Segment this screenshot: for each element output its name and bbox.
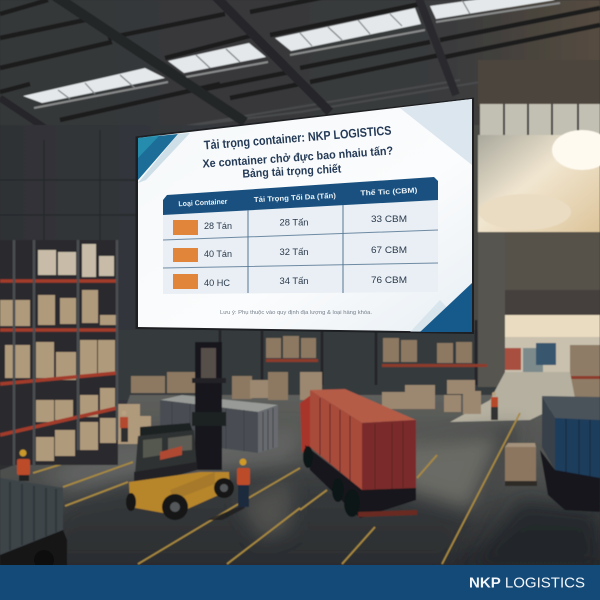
header labels: Thế Tic (CBM): [360, 185, 418, 197]
yellow floor lines: [33, 413, 520, 564]
header labels: Loại Container: [178, 197, 228, 208]
container swatches: [173, 220, 198, 289]
title: Tải trọng container: NKP LOGISTICS: [203, 123, 392, 153]
floor: [0, 372, 600, 566]
table body: [163, 200, 438, 294]
row values: 32 Tấn: [280, 247, 308, 258]
footnote: Lưu ý: Phụ thuộc vào quy định địa lượng & loại hàng khóa.: [220, 310, 372, 316]
title: [202, 123, 393, 181]
pallet cartons: [505, 443, 537, 486]
dark container foreground left: [0, 478, 67, 570]
row values: 76 CBM: [371, 275, 407, 286]
worker near forklift: [207, 458, 250, 520]
blue container truck: [540, 396, 600, 512]
back worker: [491, 392, 498, 420]
title: Xe container chở đực bao nhaiu tấn?: [202, 145, 393, 171]
screen surface: [138, 99, 472, 332]
ceiling: [0, 0, 600, 146]
forklift: [126, 342, 234, 520]
back shelving with cartons: [131, 336, 487, 414]
roof beams: [55, 0, 245, 122]
title: Bảng tải trọng chiết: [242, 163, 342, 181]
back wall: [0, 125, 500, 405]
decorative corners: [138, 99, 472, 332]
header labels: [178, 185, 418, 208]
table: [163, 177, 438, 294]
sunlit door and window: [478, 60, 600, 400]
row values: 28 Tấn: [280, 218, 308, 228]
skylights: [23, 0, 555, 103]
presentation screen: [136, 98, 474, 334]
table header: [163, 177, 438, 215]
row values: 67 CBM: [371, 245, 407, 256]
left pallet racks: [0, 240, 151, 466]
screen frame: [136, 98, 474, 334]
row values: 40 Tán: [204, 249, 232, 260]
worker at left: [17, 450, 30, 481]
red container truck: [300, 389, 417, 518]
header labels: Tải Trọng Tối Da (Tấn): [254, 191, 337, 204]
brand name: NKP LOGISTICS: [469, 574, 585, 592]
row values: 40 HC: [204, 278, 230, 289]
row values: 34 Tấn: [280, 276, 308, 287]
row values: 33 CBM: [371, 214, 407, 225]
footer band: [0, 565, 600, 600]
row values: 28 Tán: [204, 221, 232, 232]
row values: [204, 214, 407, 289]
grey container on forks: [160, 395, 278, 453]
worker by racks: [120, 410, 128, 442]
